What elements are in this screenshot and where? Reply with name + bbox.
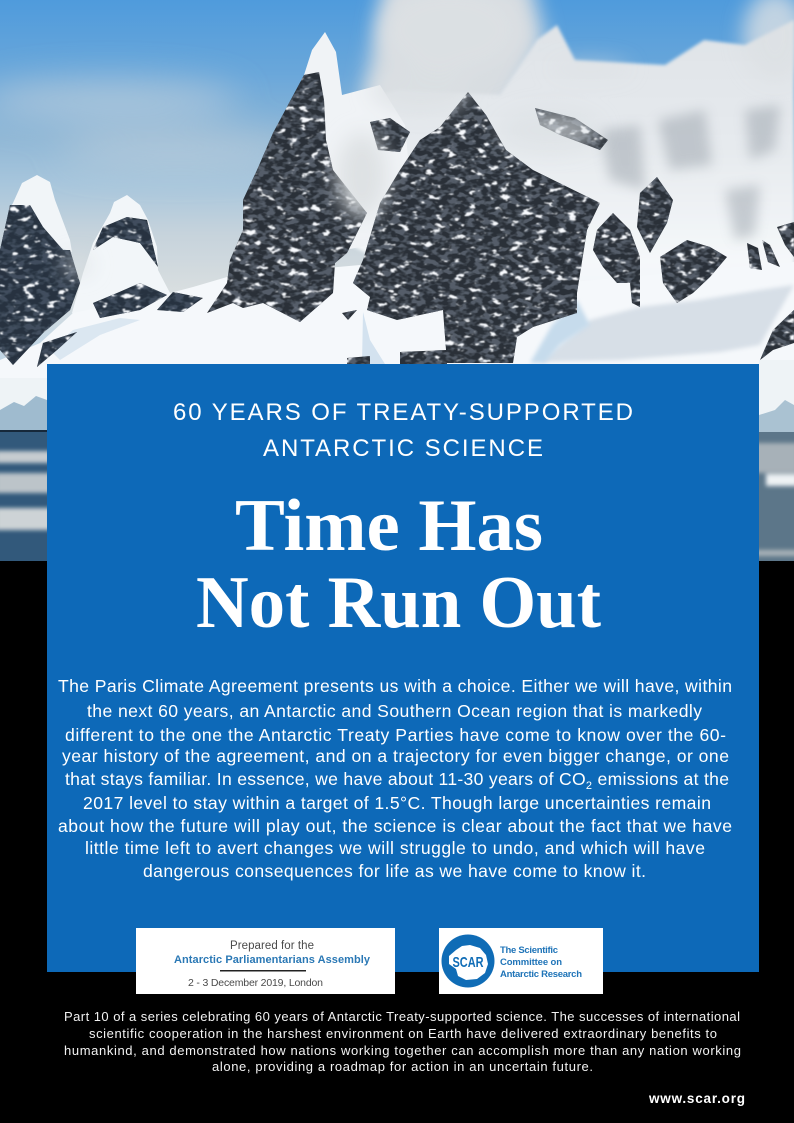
cloud bank behind the peaks [360, 0, 545, 120]
badge: prepared for the assembly: Antarctic Parliamentarians Assembly [174, 954, 371, 966]
grey streaks on massif [600, 105, 780, 240]
badge: SCAR logo and name [439, 928, 603, 994]
lower snowfield [0, 262, 794, 431]
sky [0, 0, 794, 370]
photo: snowy Antarctic mountains [0, 0, 794, 561]
badge: SCAR logo and name: Antarctic Research [500, 969, 582, 980]
main title: Time Has [235, 485, 543, 567]
body paragraph: different to the one the Antarctic Treaty Parties have come to know over the 60- [65, 725, 726, 745]
second peak snow [72, 195, 170, 330]
icon: SCAR roundel [442, 934, 494, 988]
subtitle [173, 399, 633, 462]
badge: SCAR logo and name: Committee on [500, 957, 562, 968]
subtitle: 60 YEARS OF TREATY-SUPPORTED [173, 399, 633, 426]
blue content panel [47, 364, 759, 972]
shaded snow [50, 285, 794, 364]
footer description: scientific cooperation in the harshest environment on Earth have delivered extraordinary benefits to [89, 1026, 717, 1041]
body paragraph: the next 60 years, an Antarctic and Southern Ocean region that is markedly [87, 701, 702, 721]
summit snow on main peak [304, 32, 410, 250]
drifting mist [64, 0, 794, 274]
footer description: alone, providing a roadmap for action in an uncertain future. [212, 1059, 593, 1074]
badge: prepared for the assembly [136, 928, 395, 994]
body paragraph [58, 676, 732, 881]
body paragraph: 2017 level to stay within a target of 1.5°C. Though large uncertainties remain [83, 793, 711, 813]
high cirrus clouds [0, 80, 300, 164]
body paragraph: little time left to avert changes we will struggle to undo, and which will have [85, 838, 705, 858]
icon: SCAR roundel: SCAR [452, 954, 484, 971]
dark rock faces [0, 72, 794, 367]
subtitle: ANTARCTIC SCIENCE [263, 435, 543, 462]
sea with floating ice [0, 430, 794, 561]
footer description [64, 1009, 741, 1074]
website link: www.scar.org [648, 1091, 745, 1106]
body paragraph: emissions at the [592, 769, 729, 789]
body paragraph: year history of the agreement, and on a trajectory for even bigger change, or one [62, 746, 729, 766]
body paragraph: 2 [586, 780, 592, 792]
background snow massif [340, 20, 794, 340]
body paragraph: The Paris Climate Agreement presents us with a choice. Either we will have, within [58, 676, 732, 696]
main title: Not Run Out [196, 562, 601, 644]
ice cliffs at shoreline [0, 360, 794, 432]
main title [196, 485, 601, 644]
footer description: Part 10 of a series celebrating 60 years of Antarctic Treaty-supported science. The successes of international [64, 1009, 740, 1024]
badge: SCAR logo and name: The Scientific [500, 945, 558, 956]
body paragraph: about how the future will play out, the science is clear about the fact that we have [58, 816, 732, 836]
badge: prepared for the assembly: 2 - 3 December 2019, London [188, 977, 323, 989]
body paragraph: dangerous consequences for life as we have come to know it. [143, 861, 646, 881]
footer description: humankind, and demonstrated how nations working together can accomplish more than any nation working [64, 1043, 741, 1058]
body paragraph: that stays familiar. In essence, we have about 11-30 years of CO [65, 769, 586, 789]
badge: prepared for the assembly: Prepared for the [230, 940, 314, 952]
black lower band [0, 561, 794, 1123]
left peak snow [10, 175, 72, 252]
